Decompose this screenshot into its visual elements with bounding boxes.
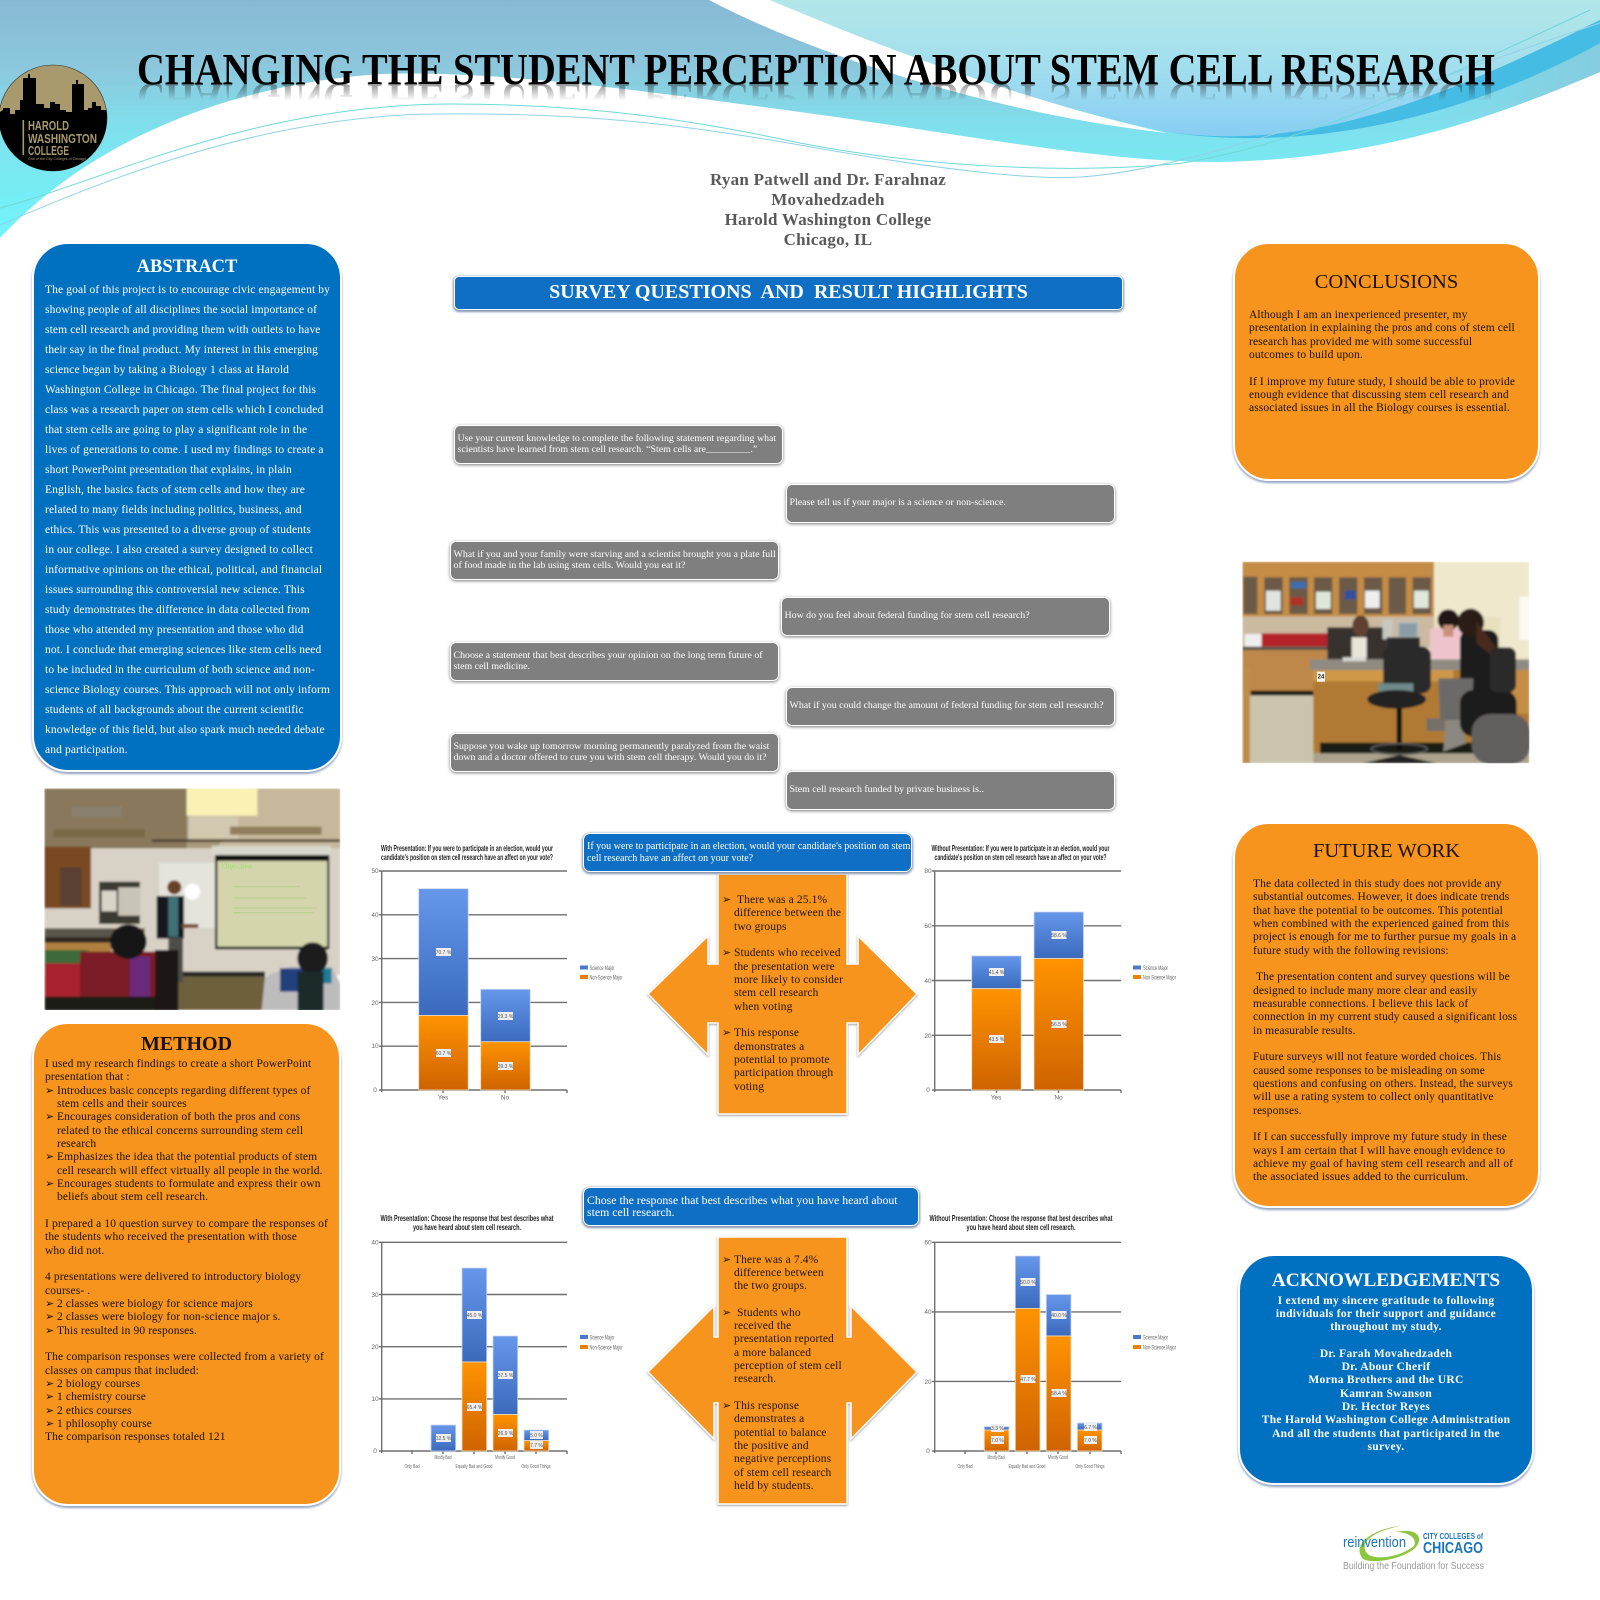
chart: without presentation, what you have heard — [924, 1213, 1176, 1470]
conclusions text: associated issues in all the Biology courses is essential. — [1249, 402, 1510, 414]
arrow 2 text: ➢ — [722, 1252, 731, 1266]
chart: with presentation, election vote — [371, 843, 622, 1102]
chart: without presentation, what you have heard: Only Bad — [958, 1464, 973, 1470]
method text: 2 classes were biology for non-science major s. — [57, 1311, 280, 1323]
chart: with presentation, what you have heard: 40 — [371, 1240, 379, 1246]
chart: with presentation, what you have heard — [371, 1213, 622, 1470]
chart: with presentation, election vote: Non-Science Major — [590, 976, 622, 982]
arrow 1 text: voting — [734, 1081, 764, 1093]
heading: conclusions: CONCLUSIONS — [1315, 271, 1458, 293]
abstract text: in our college. I also created a survey designed to collect — [45, 544, 313, 556]
arrow 1 text: when voting — [734, 1001, 792, 1013]
abstract text: related to many fields including politics, business, and — [45, 504, 302, 516]
survey question 4 — [781, 597, 1110, 636]
chart: with presentation, election vote: Yes — [438, 1094, 449, 1102]
chart: with presentation, what you have heard: 5.0 % — [530, 1433, 543, 1439]
photo: student presenting in classroom — [44, 788, 340, 1011]
arrow 2 text: difference between — [734, 1267, 824, 1279]
arrow 1 text: more likely to consider — [734, 974, 843, 986]
chart: with presentation, election vote: 70.7 % — [436, 950, 452, 956]
chart: without presentation, what you have heard: 40 — [924, 1309, 932, 1316]
future work text: questions and confusing on others. Instead, the surveys — [1253, 1078, 1513, 1090]
method text: ➢ — [45, 1310, 54, 1323]
callout: election question: cell research have an affect on your vote? — [587, 852, 753, 864]
acknowledgements text: survey. — [1368, 1441, 1404, 1453]
abstract text: The goal of this project is to encourage civic engagement by — [45, 284, 330, 296]
arrow 1 text: ➢ — [722, 893, 731, 906]
method text: ➢ — [45, 1150, 54, 1163]
survey question 4: How do you feel about federal funding for stem cell research? — [784, 610, 1030, 621]
arrow 2 text: negative perceptions — [734, 1453, 831, 1465]
abstract text: class was a research paper on stem cells which I concluded — [45, 404, 323, 416]
arrow 1 text: stem cell research — [734, 987, 819, 999]
future work text: ways I am certain that I will have enough evidence to — [1253, 1145, 1505, 1157]
method text: ➢ — [45, 1404, 54, 1417]
arrow 2 text: the positive and — [734, 1440, 809, 1452]
future work text: The presentation content and survey questions will be — [1256, 971, 1510, 983]
abstract text: lives of generations to come. I used my findings to create a — [45, 444, 324, 456]
chart: without presentation, election vote: 58.6 % — [1051, 933, 1067, 939]
method text: related to the ethical concerns surrounding stem cell — [57, 1125, 303, 1137]
abstract text: and participation. — [45, 744, 128, 756]
authors: Chicago, IL — [784, 230, 872, 249]
logo: reinvention and City Colleges of Chicago: Building the Foundation for Success — [1343, 1561, 1484, 1572]
arrow 2 text: the two groups. — [734, 1280, 807, 1292]
panel: acknowledgements — [1238, 1254, 1534, 1485]
arrow 1 text: Students who received — [734, 947, 841, 959]
heading: abstract: ABSTRACT — [137, 257, 237, 277]
chart: without presentation, what you have heard: 20 — [924, 1379, 932, 1386]
conclusions text: research has provided me with some successful — [1249, 336, 1472, 348]
arrow 2 text: potential to balance — [734, 1427, 826, 1439]
method text: The comparison responses totaled 121 — [45, 1431, 226, 1443]
future work text: in measurable results. — [1253, 1025, 1356, 1037]
chart: with presentation, election vote: 60.7 % — [436, 1051, 452, 1057]
method text: 2 biology courses — [57, 1378, 140, 1390]
chart: with presentation, election vote: 50 — [371, 868, 379, 875]
callout: election question — [583, 833, 912, 872]
chart: without presentation, election vote: No — [1054, 1094, 1063, 1102]
future work text: future study with the following revisions: — [1253, 945, 1449, 957]
chart: without presentation, what you have heard: Science Major — [1143, 1336, 1168, 1342]
acknowledgements text: throughout my study. — [1330, 1321, 1442, 1333]
future work text: substantial outcomes. However, it does indicate trends — [1253, 891, 1509, 903]
conclusions text: Although I am an inexperienced presenter, my — [1249, 309, 1467, 321]
chart: with presentation, what you have heard: 45.0 % — [467, 1313, 483, 1319]
chart: with presentation, what you have heard: 10 — [371, 1396, 379, 1403]
chart: without presentation, what you have heard: 7.0 % — [991, 1438, 1004, 1444]
arrow 2 text: ➢ — [722, 1399, 731, 1412]
chart: with presentation, election vote: 20 — [371, 1000, 379, 1007]
acknowledgements text — [1262, 1294, 1510, 1453]
survey question 3: What if you and your family were starving and a scientist brought you a plate full — [454, 549, 776, 560]
future work text: project is enough for me to further pursue my goals in a — [1253, 931, 1516, 943]
chart: without presentation, what you have heard: Only Good Things — [1076, 1464, 1105, 1470]
panel: conclusions — [1233, 242, 1540, 481]
chart: without presentation, election vote: 41.4 % — [989, 970, 1005, 976]
logo: reinvention and City Colleges of Chicago: CITY COLLEGES of — [1423, 1532, 1483, 1541]
method text: 4 presentations were delivered to introductory biology — [45, 1271, 301, 1283]
chart: without presentation, election vote: 20 — [924, 1033, 932, 1040]
chart: with presentation, what you have heard: 20 — [371, 1344, 379, 1351]
arrow 1 text: potential to promote — [734, 1054, 830, 1066]
chart: without presentation, election vote: 0 — [926, 1087, 930, 1094]
arrow 2 text: a more balanced — [734, 1347, 811, 1359]
projected slide heading: Objective — [222, 861, 252, 870]
chart: without presentation, what you have heard: Non-Science Major — [1143, 1346, 1176, 1352]
arrow 1 text: the presentation were — [734, 961, 835, 973]
arrow 2 text: This response — [734, 1400, 799, 1412]
title — [137, 45, 1495, 123]
acknowledgements text: Kamran Swanson — [1340, 1388, 1432, 1400]
arrow 2 text: held by students. — [734, 1480, 814, 1492]
bench number tag — [1317, 672, 1325, 682]
future work text: responses. — [1253, 1105, 1302, 1117]
bench number tag: 24 — [1318, 675, 1325, 681]
method text: Encourages students to formulate and express their own — [57, 1178, 321, 1190]
method text: 1 chemistry course — [57, 1391, 146, 1403]
arrow 1 text: participation through — [734, 1067, 833, 1079]
survey question 7: down and a doctor offered to cure you with stem cell therapy. Would you do it? — [454, 752, 767, 762]
chart: without presentation, election vote — [924, 843, 1176, 1102]
authors — [710, 170, 946, 249]
abstract text: stem cell research and providing them with outlets to have — [45, 324, 321, 336]
survey question 5: Choose a statement that best describes your opinion on the long term future of — [454, 650, 763, 661]
chart: with presentation, what you have heard: Equally Bad and Good — [456, 1464, 493, 1470]
acknowledgements text: individuals for their support and guidance — [1276, 1308, 1496, 1320]
arrow: second double-headed cross arrow — [648, 1237, 917, 1504]
method text: I used my research findings to create a short PowerPoint — [45, 1058, 311, 1070]
chart: with presentation, election vote: 0 — [373, 1087, 377, 1094]
logo: Harold Washington College: One of the City Colleges of Chicago — [28, 156, 87, 161]
survey question 7: Suppose you wake up tomorrow morning permanently paralyzed from the waist — [454, 741, 769, 752]
survey question 6: What if you could change the amount of federal funding for stem cell research? — [790, 700, 1103, 711]
arrow 2 text: of stem cell research — [734, 1467, 831, 1479]
method text: classes on campus that included: — [45, 1365, 199, 1377]
heading: future work: FUTURE WORK — [1313, 840, 1460, 862]
chart: without presentation, what you have heard: 3.3 % — [991, 1426, 1004, 1432]
future work text: measurable connections. I believe this lack of — [1253, 998, 1468, 1010]
chart: without presentation, election vote: 56.5 % — [1051, 1022, 1067, 1028]
method text: 2 ethics courses — [57, 1405, 132, 1417]
abstract text: science Biology courses. This approach will not only inform — [45, 684, 330, 696]
method text: ➢ — [45, 1324, 54, 1337]
chart: with presentation, what you have heard: 12.5 % — [436, 1436, 452, 1442]
chart: with presentation, what you have heard: 7.7 % — [530, 1443, 543, 1449]
abstract text: their say in the final product. My interest in this emerging — [45, 344, 318, 356]
chart: with presentation, what you have heard: Only Good Things — [522, 1464, 551, 1470]
abstract text: not. I conclude that emerging sciences like stem cells need — [45, 644, 321, 656]
survey question 8: Stem cell research funded by private business is.. — [790, 784, 984, 795]
chart: without presentation, election vote: Science Major — [1143, 966, 1168, 972]
method text — [45, 1058, 328, 1443]
chart: without presentation, what you have heard: 40.0 % — [1051, 1313, 1067, 1319]
chart: with presentation, election vote: No — [501, 1094, 510, 1102]
panel: future work — [1233, 822, 1540, 1208]
abstract text: science began by taking a Biology 1 class at Harold — [45, 364, 289, 376]
survey question 3: of food made in the lab using stem cells. Would you eat it? — [454, 560, 685, 570]
chart: without presentation, election vote: candidate's position on stem cell research have an affect on your vote? — [934, 852, 1106, 862]
logo: reinvention and City Colleges of Chicago: reinvention — [1343, 1534, 1406, 1551]
method text: ➢ — [45, 1417, 54, 1430]
callout: heard question: stem cell research. — [587, 1204, 674, 1218]
survey question 2 — [786, 484, 1115, 523]
survey question 7 — [450, 733, 779, 772]
callout: heard question — [583, 1187, 919, 1226]
chart: without presentation, what you have heard: 50.0 % — [1020, 1280, 1036, 1286]
arrow 1 text: two groups — [734, 921, 787, 933]
abstract text: study demonstrates the difference in data collected from — [45, 604, 310, 616]
panel: abstract — [32, 242, 342, 772]
chart: with presentation, what you have heard: 37.5 % — [498, 1373, 514, 1379]
chart: with presentation, what you have heard: 65.4 % — [467, 1405, 483, 1411]
method text: ➢ — [45, 1390, 54, 1403]
chart: with presentation, what you have heard: With Presentation: Choose the response that best describes what — [380, 1213, 554, 1223]
callout: heard question: Chose the response that best describes what you have heard about — [587, 1193, 898, 1207]
chart: without presentation, election vote: Non-Science Major — [1143, 976, 1176, 982]
chart: with presentation, election vote: candidate's position on stem cell research have an affect on your vote? — [381, 852, 553, 862]
future work text: connection in my current study caused a significant loss — [1253, 1011, 1517, 1023]
arrow 2 text: Students who — [737, 1307, 801, 1319]
abstract text: ethics. This was presented to a diverse group of students — [45, 524, 311, 536]
survey question 8 — [786, 771, 1115, 810]
abstract text — [45, 284, 330, 756]
logo: Harold Washington College: COLLEGE — [28, 143, 69, 158]
abstract text: those who attended my presentation and those who did — [45, 624, 304, 636]
chart: without presentation, election vote: 40 — [924, 978, 932, 985]
arrow 1 text: There was a 25.1% — [737, 894, 827, 906]
chart: with presentation, what you have heard: you have heard about stem cell research. — [413, 1222, 521, 1232]
arrow 1 text: demonstrates a — [734, 1041, 804, 1053]
method text: This resulted in 90 responses. — [57, 1325, 197, 1337]
abstract text: students of all backgrounds about the current scientific — [45, 704, 304, 716]
chart: without presentation, election vote: Without Presentation: If you were to participate in an election, would your — [932, 843, 1110, 853]
chart: without presentation, what you have heard: Mostly Bad — [988, 1455, 1005, 1461]
method text: cell research will effect virtually all people in the world. — [57, 1165, 323, 1177]
method text: Emphasizes the idea that the potential products of stem — [57, 1151, 317, 1163]
method text: ➢ — [45, 1110, 54, 1123]
chart: with presentation, what you have heard: Only Bad — [404, 1464, 420, 1470]
future work text: The data collected in this study does not provide any — [1253, 878, 1502, 890]
conclusions text: If I improve my future study, I should be able to provide — [1249, 376, 1515, 388]
acknowledgements text: Dr. Hector Reyes — [1342, 1401, 1430, 1413]
survey question 1 — [454, 425, 783, 464]
method text: research — [57, 1138, 96, 1150]
authors: Harold Washington College — [725, 210, 931, 229]
abstract text: to be included in the curriculum of both science and non- — [45, 664, 315, 676]
survey question 1: scientists have learned from stem cell research. “Stem cells are_________.” — [458, 444, 757, 454]
chart: without presentation, election vote: Yes — [991, 1094, 1002, 1102]
chart: without presentation, what you have heard: 0 — [926, 1448, 930, 1455]
chart: without presentation, what you have heard: you have heard about stem cell research. — [966, 1222, 1076, 1232]
arrow 1 text: difference between the — [734, 907, 841, 919]
chart: with presentation, election vote: Science Major — [590, 966, 615, 972]
chart: without presentation, what you have heard: Equally Bad and Good — [1008, 1464, 1046, 1470]
chart: with presentation, election vote: 39.3 % — [498, 1064, 514, 1070]
panel: method — [32, 1022, 341, 1506]
arrow 2 text: perception of stem cell — [734, 1360, 842, 1372]
abstract text: knowledge of this field, but also spark much needed debate — [45, 724, 325, 736]
survey question 5: stem cell medicine. — [454, 660, 530, 672]
future work text: will use a rating system to collect only quantitative — [1253, 1091, 1494, 1103]
arrow 2 text: There was a 7.4% — [734, 1254, 818, 1266]
survey heading bar — [454, 276, 1123, 310]
chart: without presentation, what you have heard: 7.0 % — [1084, 1438, 1097, 1444]
acknowledgements text: I extend my sincere gratitude to following — [1278, 1294, 1494, 1306]
method text: ➢ — [45, 1377, 54, 1390]
future work text: If I can successfully improve my future study in these — [1253, 1131, 1507, 1143]
chart: with presentation, what you have heard: Mostly Good — [495, 1455, 515, 1461]
arrow 1 text: This response — [734, 1027, 799, 1039]
arrow 1 text: ➢ — [722, 946, 731, 959]
method text: The comparison responses were collected from a variety of — [45, 1351, 324, 1363]
abstract text: short PowerPoint presentation that explains, in plain — [45, 464, 292, 476]
header wave background — [0, 0, 1600, 238]
chart: without presentation, what you have heard: 58.4 % — [1051, 1391, 1067, 1397]
future work text: achieve my goal of having stem cell research and all of — [1253, 1158, 1513, 1170]
arrow 2 text: demonstrates a — [734, 1413, 804, 1425]
method text: presentation that : — [45, 1071, 130, 1083]
survey question 6 — [786, 687, 1115, 726]
arrow 2 text: research. — [734, 1373, 776, 1385]
heading: acknowledgements: ACKNOWLEDGEMENTS — [1272, 1270, 1500, 1291]
survey question 1: Use your current knowledge to complete the following statement regarding what — [458, 433, 776, 444]
acknowledgements text: Dr. Farah Movahedzadeh — [1320, 1348, 1452, 1360]
method text: who did not. — [45, 1245, 104, 1257]
chart: without presentation, what you have heard: 60 — [924, 1240, 932, 1246]
abstract text: English, the basics facts of stem cells and how they are — [45, 484, 305, 496]
chart: with presentation, what you have heard: 26.9 % — [498, 1431, 514, 1437]
logo: Harold Washington College — [0, 65, 108, 172]
abstract text: Washington College in Chicago. The final project for this — [45, 384, 316, 396]
chart: with presentation, election vote: 29.3 % — [498, 1014, 514, 1020]
authors: Ryan Patwell and Dr. Farahnaz — [710, 170, 946, 189]
chart: with presentation, election vote: With Presentation: If you were to participate in an election, would your — [381, 843, 553, 853]
acknowledgements text: Dr. Abour Cherif — [1342, 1361, 1430, 1373]
chart: without presentation, election vote: 80 — [924, 868, 932, 875]
chart: without presentation, election vote: 60 — [924, 923, 932, 930]
method text: Introduces basic concepts regarding different types of — [57, 1085, 310, 1097]
chart: without presentation, what you have heard: 6.7 % — [1084, 1425, 1097, 1431]
chart: with presentation, what you have heard: Science Major — [590, 1336, 615, 1342]
future work text — [1253, 878, 1517, 1183]
arrow 1 text: ➢ — [722, 1026, 731, 1039]
logo: reinvention and City Colleges of Chicago: CHICAGO — [1423, 1540, 1483, 1557]
photo: students in laboratory — [1242, 562, 1530, 764]
survey question 3 — [450, 541, 779, 580]
chart: without presentation, what you have heard: Mostly Good — [1048, 1455, 1068, 1461]
survey question 5 — [450, 642, 779, 681]
chart: with presentation, what you have heard: Mostly Bad — [434, 1455, 452, 1461]
chart: with presentation, what you have heard: 0 — [373, 1448, 377, 1455]
chart: without presentation, what you have heard: Without Presentation: Choose the response that best describes what — [930, 1213, 1113, 1223]
method text: the students who received the presentation with those — [45, 1231, 297, 1243]
chart: without presentation, election vote: 43.5 % — [989, 1037, 1005, 1043]
method text: ➢ — [45, 1084, 54, 1097]
chart: with presentation, election vote: 30 — [371, 956, 379, 963]
logo: Harold Washington College: HAROLD — [28, 118, 69, 133]
heading: method: METHOD — [141, 1033, 232, 1055]
arrow 2 text — [722, 1252, 842, 1492]
abstract text: informative opinions on the ethical, political, and financial — [45, 564, 322, 576]
arrow 2 text: received the — [734, 1320, 791, 1332]
conclusions text — [1249, 309, 1515, 414]
arrow 2 text: presentation reported — [734, 1333, 834, 1345]
conclusions text: enough evidence that discussing stem cell research and — [1249, 389, 1509, 401]
abstract text: showing people of all disciplines the social importance of — [45, 304, 317, 316]
method text: Encourages consideration of both the pros and cons — [57, 1111, 300, 1123]
future work text: designed to include many more clear and easily — [1253, 985, 1477, 997]
future work text: Future surveys will not feature worded choices. This — [1253, 1051, 1501, 1063]
method text: 1 philosophy course — [57, 1418, 152, 1430]
arrow 1 text — [722, 893, 843, 1093]
future work text: the associated issues added to the curriculum. — [1253, 1171, 1468, 1183]
method text: 2 classes were biology for science majors — [57, 1298, 253, 1310]
logo: reinvention and City Colleges of Chicago — [1343, 1525, 1484, 1572]
conclusions text: outcomes to build upon. — [1249, 349, 1363, 361]
future work text: caused some responses to be misleading on some — [1253, 1065, 1485, 1077]
method text: I prepared a 10 question survey to compare the responses of — [45, 1218, 328, 1230]
chart: with presentation, election vote: 10 — [371, 1043, 379, 1050]
chart: with presentation, what you have heard: Non-Science Major — [590, 1346, 622, 1352]
chart: with presentation, election vote: 40 — [371, 912, 379, 919]
method text: ➢ — [45, 1297, 54, 1310]
acknowledgements text: And all the students that participated in the — [1272, 1428, 1500, 1440]
method text: beliefs about stem cell research. — [57, 1191, 208, 1203]
acknowledgements text: Morna Brothers and the URC — [1308, 1374, 1464, 1386]
future work text: that have the potential to be outcomes. This potential — [1253, 905, 1503, 917]
logo: Harold Washington College: WASHINGTON — [28, 131, 97, 146]
abstract text: issues surrounding this controversial new science. This — [45, 584, 305, 596]
arrow: first double-headed cross arrow — [648, 874, 917, 1114]
callout: election question: If you were to participate in an election, would your candidate's position on stem — [587, 841, 910, 852]
method text: courses- . — [45, 1285, 90, 1297]
arrow 2 text: ➢ — [722, 1306, 731, 1319]
future work text: when combined with the experienced gained from this — [1253, 918, 1509, 930]
survey question 2: Please tell us if your major is a science or non-science. — [790, 497, 1006, 508]
chart: with presentation, what you have heard: 30 — [371, 1292, 379, 1299]
chart: without presentation, what you have heard: 47.7 % — [1020, 1377, 1036, 1383]
acknowledgements text: The Harold Washington College Administration — [1262, 1414, 1510, 1426]
authors: Movahedzadeh — [771, 190, 885, 209]
conclusions text: presentation in explaining the pros and cons of stem cell — [1249, 322, 1515, 334]
abstract text: that stem cells are going to play a significant role in the — [45, 424, 307, 436]
survey heading bar: SURVEY QUESTIONS AND RESULT HIGHLIGHTS — [549, 281, 1028, 303]
method text: stem cells and their sources — [57, 1098, 187, 1110]
method text: ➢ — [45, 1177, 54, 1190]
